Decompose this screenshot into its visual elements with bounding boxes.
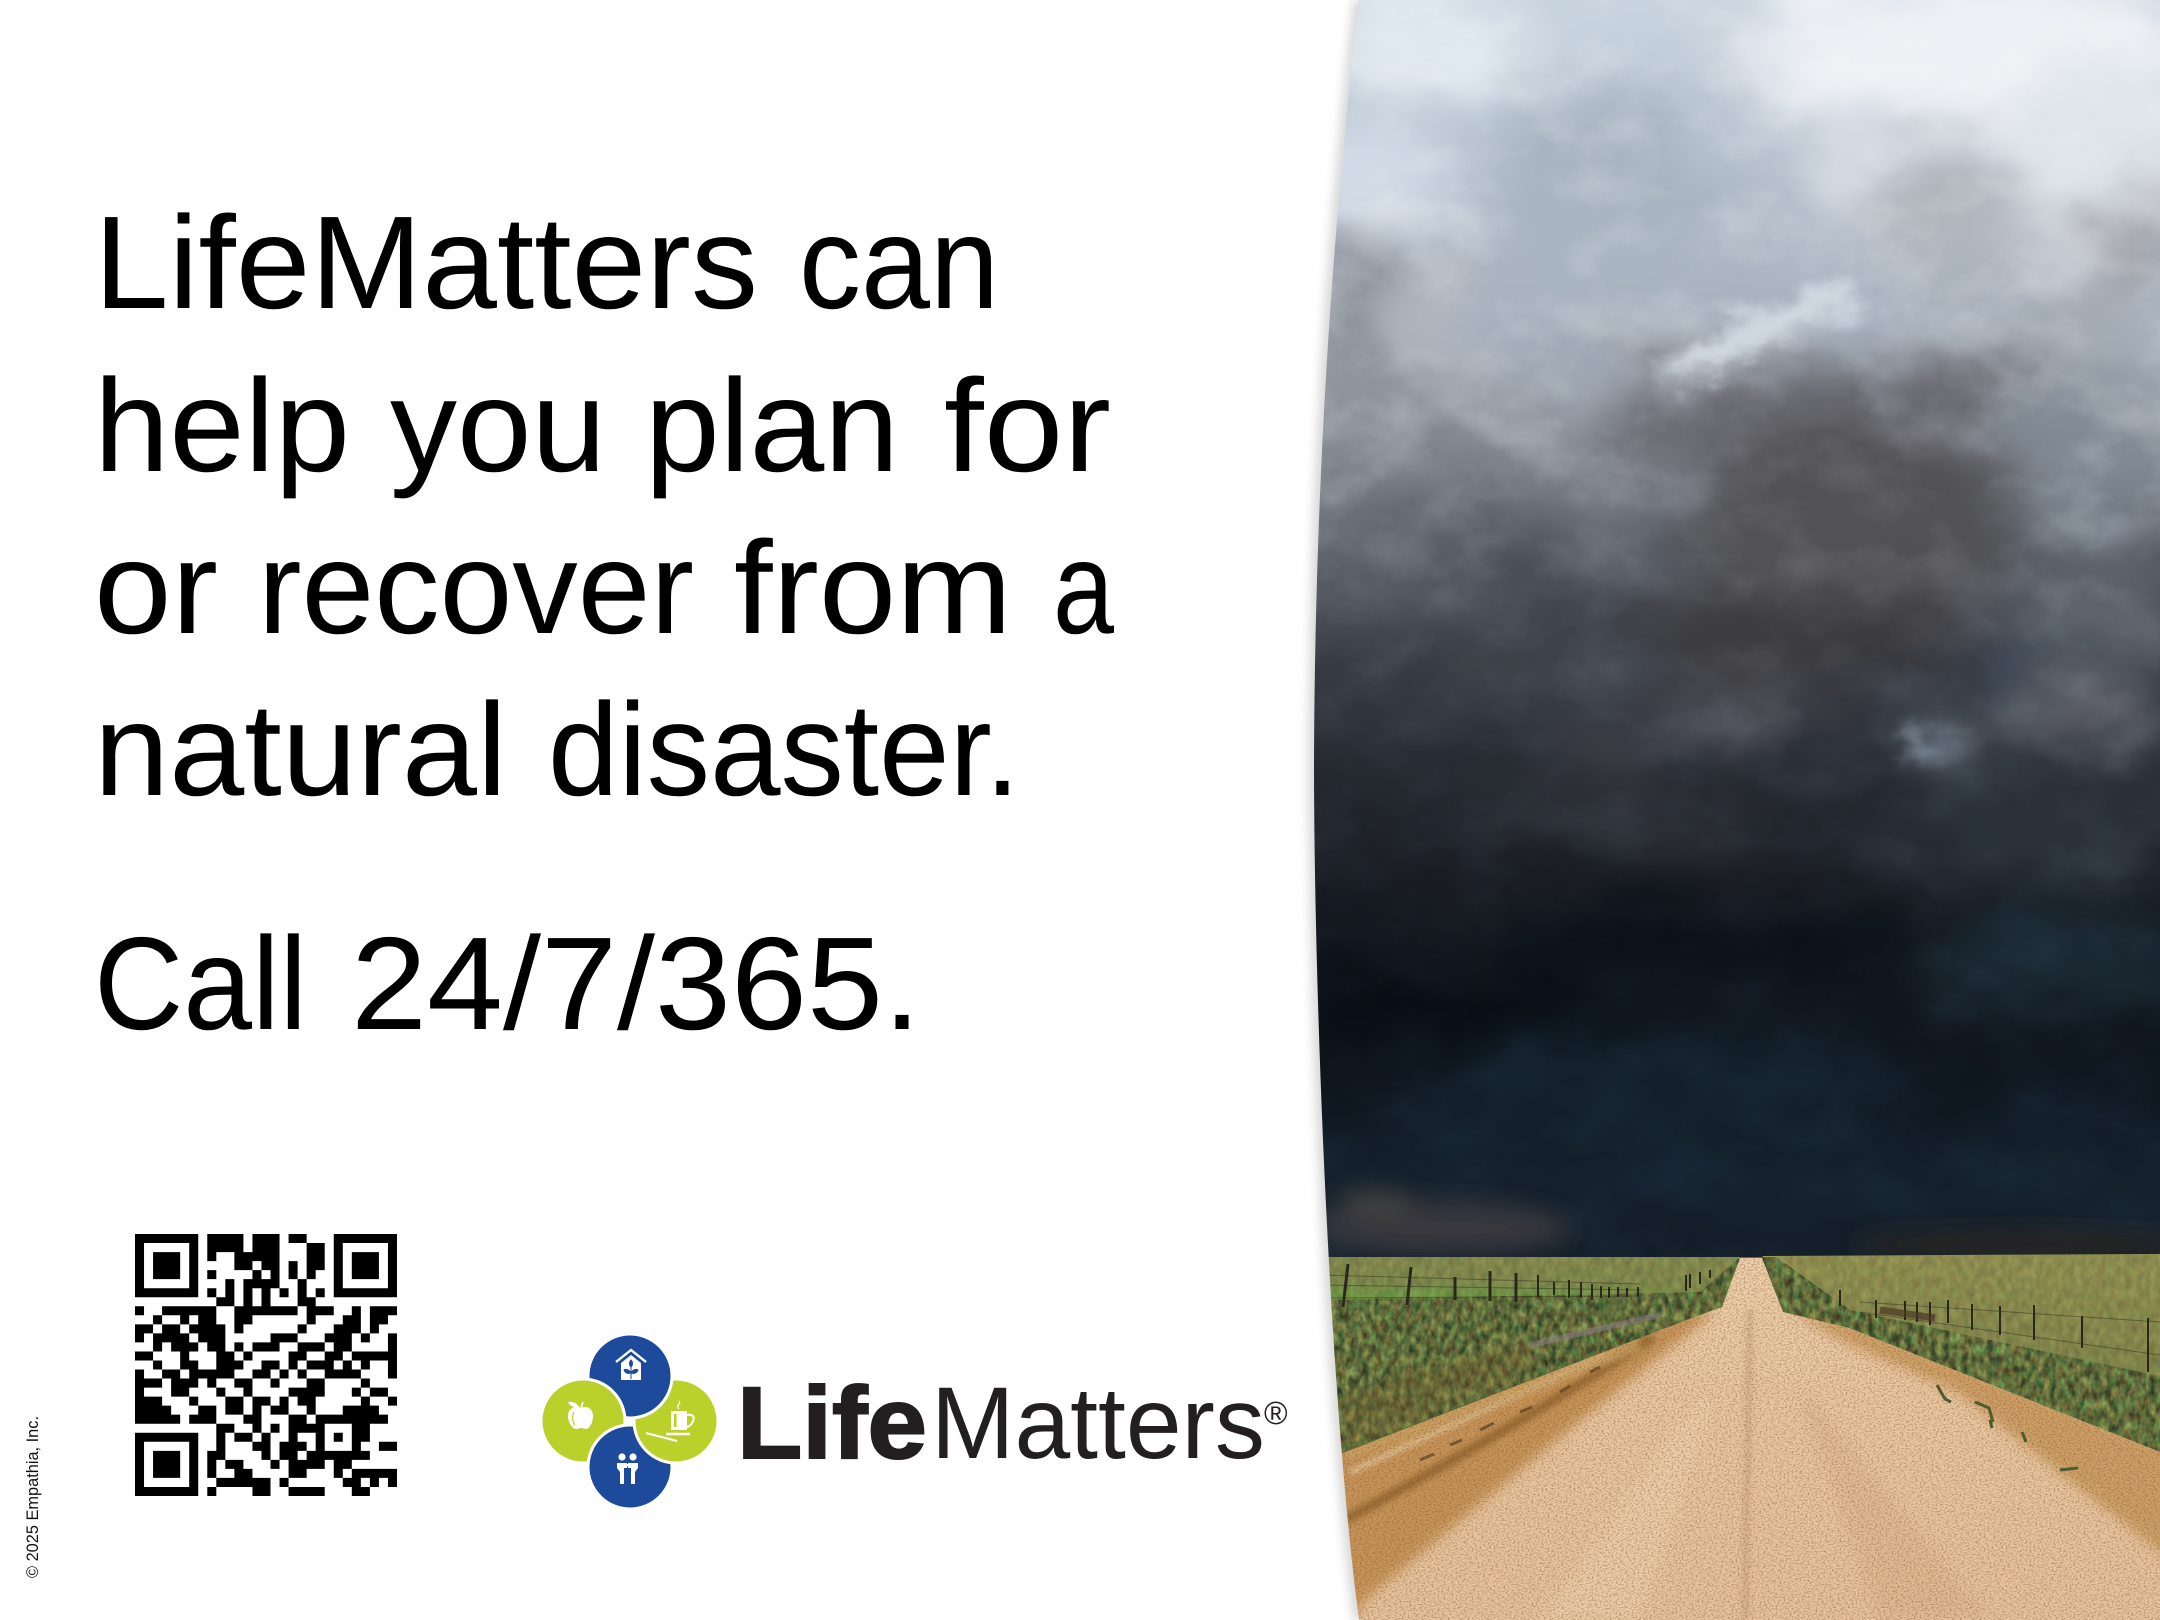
icon: coffee mug and pencil — [646, 1401, 694, 1441]
weed patches on the road — [1937, 1385, 2078, 1470]
copyright note: © 2025 Empathia, Inc. — [23, 1416, 42, 1578]
fields — [1328, 1254, 2160, 1454]
fences — [1320, 1264, 2160, 1372]
QR code — [135, 1234, 397, 1496]
line 2: you — [390, 352, 606, 499]
logo: LifeMatters — [541, 1334, 1288, 1509]
logo mark: four petals — [541, 1334, 718, 1509]
call to action: 24/7/365. — [351, 910, 921, 1057]
line 4: natural — [94, 676, 507, 823]
line 2: help — [94, 352, 350, 499]
low cloud band above horizon — [1310, 1193, 2160, 1256]
photo edge shadow — [1308, 0, 1450, 1620]
line 1: LifeMatters — [94, 189, 758, 336]
line 1: can — [799, 189, 999, 336]
icon: two people — [617, 1453, 638, 1484]
icon: house with plant — [616, 1350, 646, 1380]
logo wordmark: ® — [1264, 1395, 1288, 1431]
line 4 — [94, 676, 1020, 823]
photo: storm clouds over a dirt road — [1314, 0, 2160, 1620]
logo wordmark: Life — [737, 1366, 927, 1480]
heading: main message — [94, 189, 1114, 823]
line 3: from — [734, 514, 1012, 661]
icon: apple — [568, 1402, 593, 1429]
bright cloud ridge — [1652, 265, 1949, 765]
line 4: disaster. — [548, 676, 1020, 823]
logo wordmark: Matters — [931, 1366, 1265, 1480]
line 2: plan — [645, 352, 899, 499]
dirt road — [1300, 1256, 2160, 1620]
line 3: or — [94, 514, 218, 661]
call to action — [94, 910, 921, 1057]
line 3: a — [1053, 514, 1114, 661]
line 3: recover — [258, 514, 694, 661]
line 2: for — [944, 352, 1111, 499]
logo wordmark — [737, 1366, 1288, 1480]
line 3 — [94, 514, 1114, 661]
line 2 — [94, 352, 1111, 499]
call to action: Call — [94, 910, 307, 1057]
storm sky — [1200, 0, 2160, 1360]
